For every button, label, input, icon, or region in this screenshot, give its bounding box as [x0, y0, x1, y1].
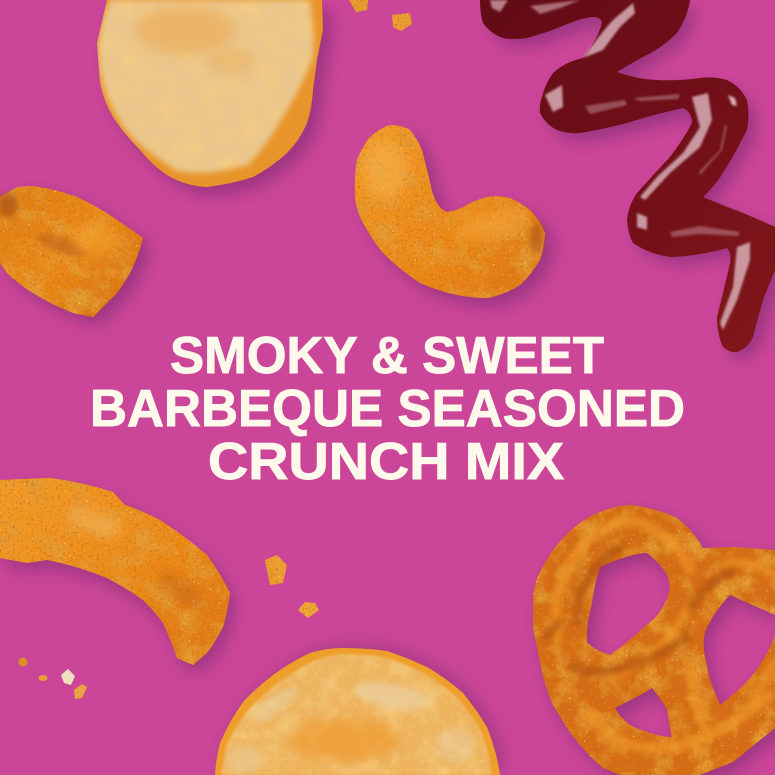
image: curved puff bottom left	[0, 478, 236, 674]
image: bottom rye chip	[210, 645, 506, 775]
title	[90, 327, 685, 491]
image: crumbs bottom left	[18, 658, 87, 699]
image: barbeque sauce squiggle	[480, 0, 775, 361]
image: top rye chip	[90, 0, 332, 196]
title line 2: BARBEQUE SEASONED	[90, 380, 685, 438]
image: crumbs centre	[265, 555, 319, 618]
image: seasoned nugget left	[0, 186, 151, 325]
sauce glossy highlights	[490, 0, 750, 330]
title line 1: SMOKY & SWEET	[170, 327, 604, 385]
title line 3: CRUNCH MIX	[208, 433, 564, 491]
image: cashew piece	[355, 125, 554, 307]
pretzel highlights	[555, 522, 775, 748]
image: crumbs top	[349, 0, 412, 31]
image: pretzel	[525, 500, 775, 775]
